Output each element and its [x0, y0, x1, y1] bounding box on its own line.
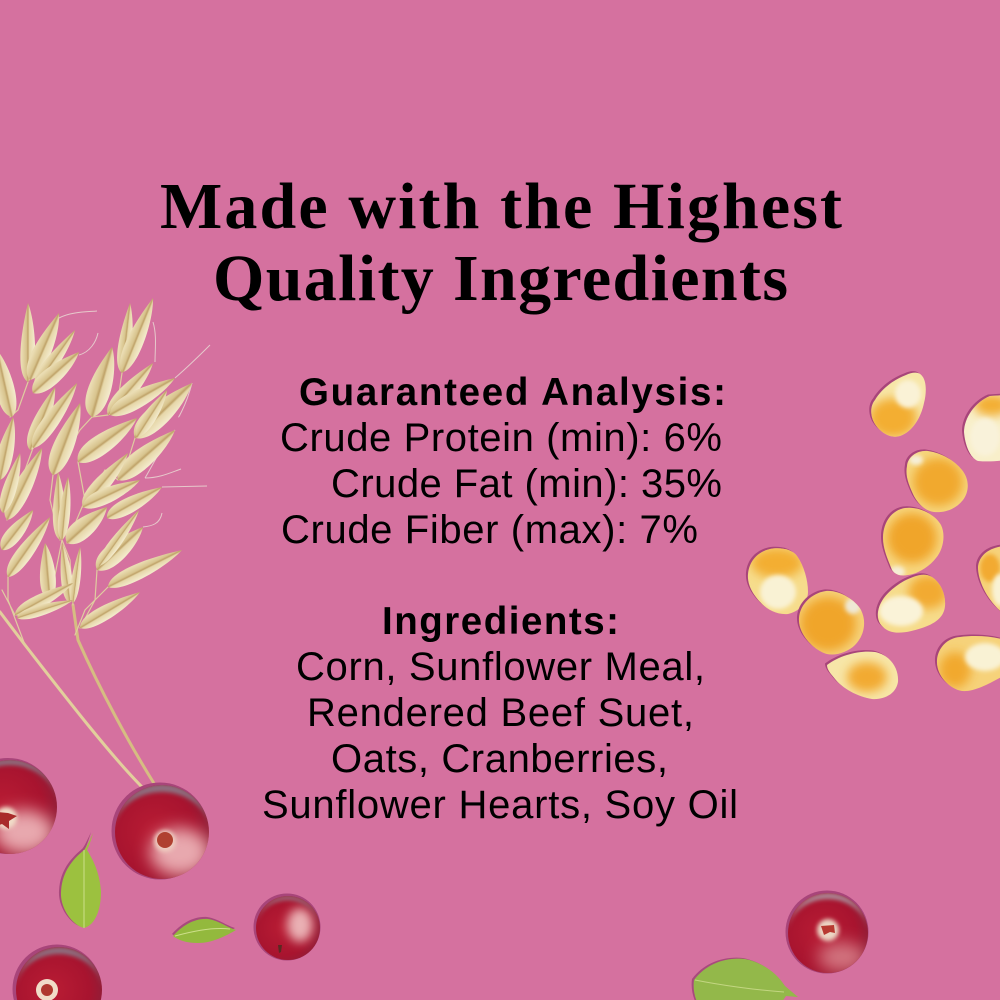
cranberry: far left: [0, 758, 58, 854]
leaf: upright: [59, 832, 101, 928]
corn kernel 3: [904, 449, 968, 512]
ingredients text block: Sunflower Hearts, Soy Oil: [262, 783, 738, 827]
corn kernel 2: [962, 394, 1000, 461]
corn kernel 7: [876, 573, 948, 633]
corn kernel 4: [881, 506, 943, 578]
title: Quality Ingredients: [213, 242, 788, 315]
title: [160, 170, 842, 315]
cranberry: bottom right: [786, 890, 868, 974]
ingredients text block: Ingredients:: [382, 600, 619, 643]
corn kernel 8: [825, 650, 898, 699]
ingredients text block: [262, 600, 738, 827]
oat stems: [0, 373, 155, 788]
cranberry: small: [254, 894, 320, 960]
corn kernel 10: [935, 634, 1000, 691]
guaranteed analysis text block: Guaranteed Analysis:: [299, 371, 726, 414]
guaranteed analysis text block: Crude Protein (min): 6%: [280, 416, 722, 460]
ingredients text block: Corn, Sunflower Meal,: [296, 645, 705, 689]
leaf: horizontal: [172, 917, 236, 943]
illustration: corn kernels: [746, 371, 1000, 699]
guaranteed analysis text block: Crude Fat (min): 35%: [331, 462, 722, 506]
corn kernel 5: [746, 547, 808, 614]
cranberry: bottom left: [12, 944, 102, 1000]
oat awns: [59, 311, 210, 527]
cranberry: with stems: [112, 782, 210, 880]
guaranteed analysis text block: Crude Fiber (max): 7%: [281, 508, 698, 552]
ingredients text block: Rendered Beef Suet,: [307, 691, 694, 735]
corn kernel 1: [869, 371, 926, 438]
title: Made with the Highest: [160, 170, 842, 243]
leaf: bottom right: [692, 958, 798, 1000]
corn kernel 6: [797, 589, 864, 655]
illustration: oat sprigs: [0, 295, 210, 788]
corn kernel 9: [976, 544, 1000, 615]
oat grains: [0, 295, 200, 634]
ingredients text block: Oats, Cranberries,: [331, 737, 668, 781]
guaranteed analysis text block: [280, 371, 726, 552]
